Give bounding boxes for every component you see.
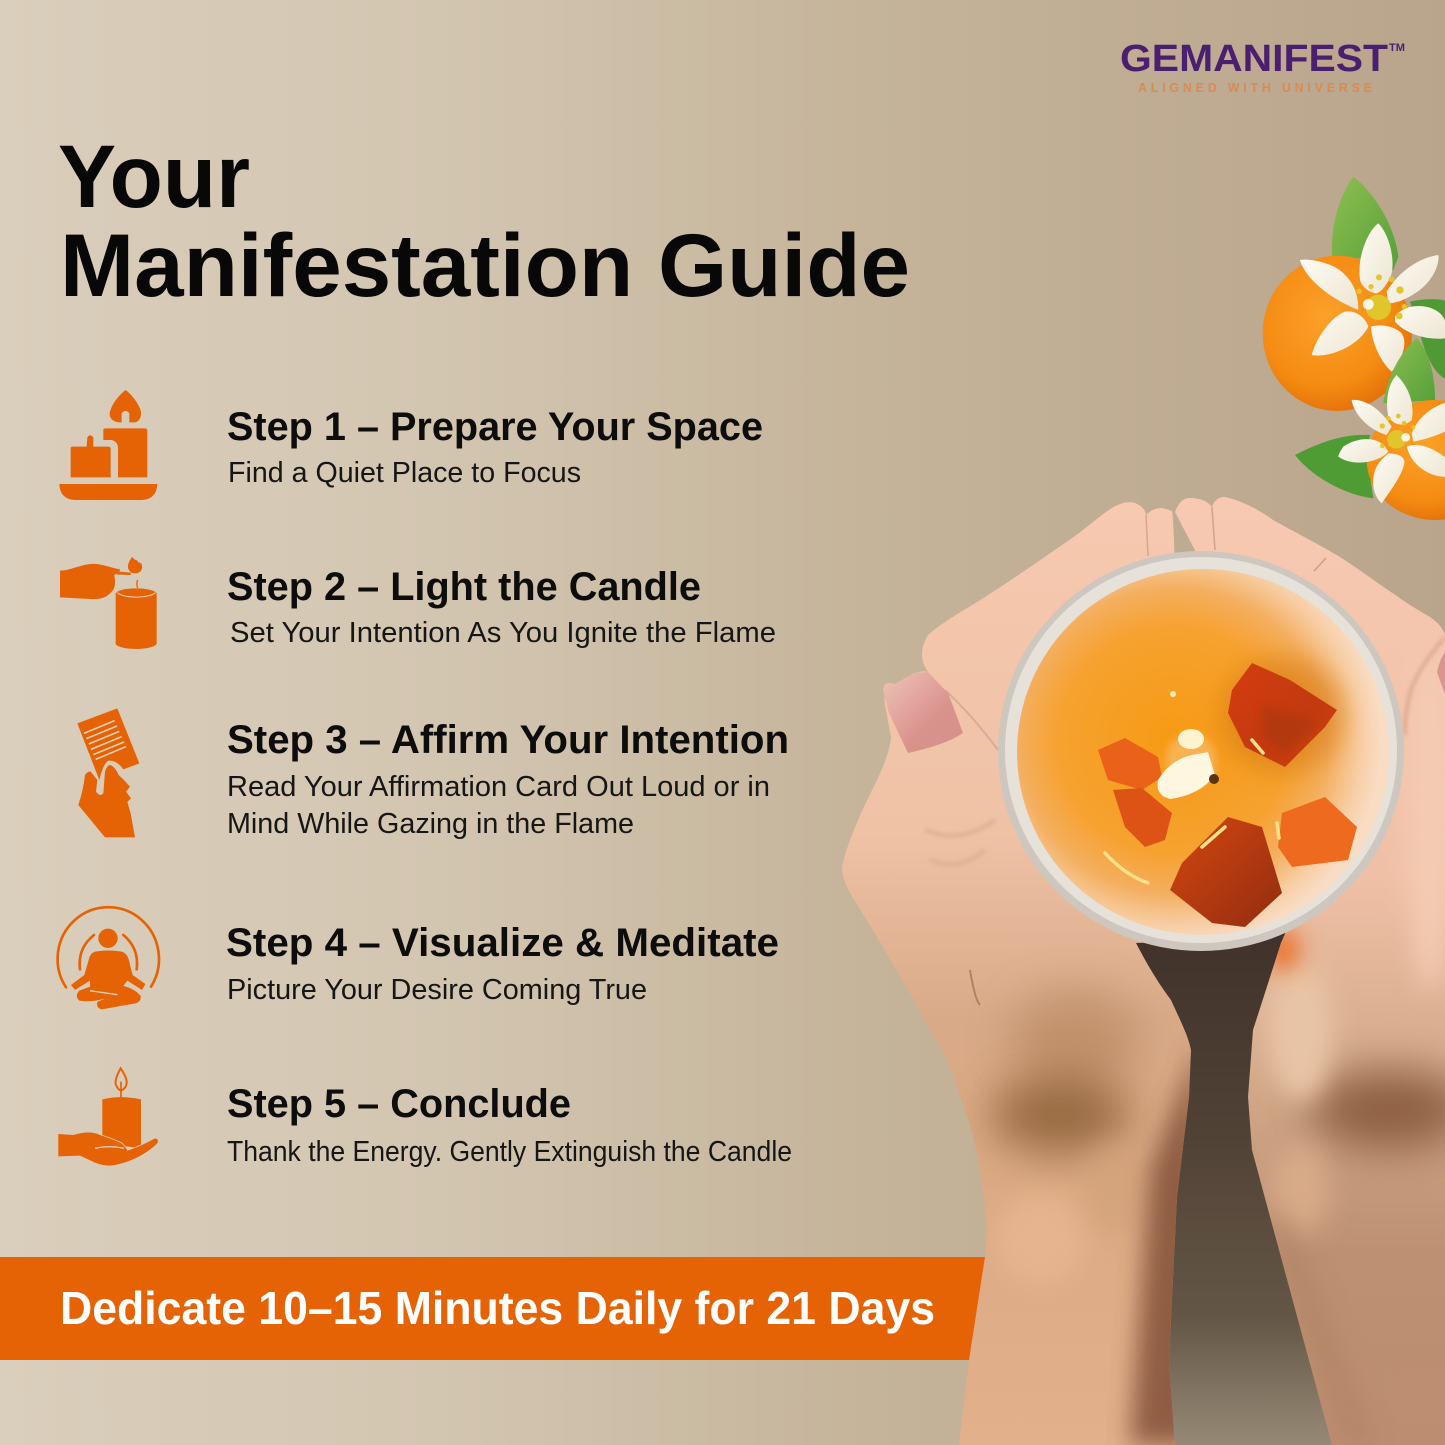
step 5 text: Thank the Energy. Gently Extinguish the Candle (227, 1136, 792, 1168)
flame (1158, 691, 1219, 799)
orange two (1367, 400, 1445, 520)
step 3 text: Mind While Gazing in the Flame (227, 808, 634, 840)
upper leaves (1332, 177, 1445, 380)
title: Your (58, 126, 250, 226)
blossom two stamens (1380, 414, 1415, 449)
step 3 text: Step 3 – Affirm Your Intention (227, 718, 789, 762)
gemstones (1098, 657, 1357, 927)
logo (1120, 38, 1405, 95)
blossom one (1300, 223, 1445, 372)
logo: ALIGNED WITH UNIVERSE (1138, 81, 1372, 95)
icon: hand holding card (77, 708, 139, 837)
icon: candle on open hand (58, 1068, 158, 1166)
step 1 text (227, 405, 763, 489)
step 1 text: Step 1 – Prepare Your Space (227, 405, 763, 449)
step 4 text (226, 921, 779, 1006)
logo: TM (1389, 42, 1405, 54)
right hand (1175, 497, 1445, 1445)
step 2 text: Set Your Intention As You Ignite the Flame (230, 617, 776, 649)
step 5 text: Step 5 – Conclude (227, 1082, 571, 1126)
step 4 text: Step 4 – Visualize & Meditate (226, 921, 779, 965)
candle (998, 551, 1404, 951)
icon: meditating figure (58, 907, 159, 1009)
title (58, 126, 910, 315)
banner: Dedicate 10–15 Minutes Daily for 21 Days (60, 1282, 935, 1334)
logo: GEMANIFEST (1120, 38, 1388, 80)
step 2 text (227, 565, 776, 649)
banner (0, 1257, 992, 1360)
step 5 text (227, 1082, 792, 1168)
icon: hand lighting candle (60, 557, 157, 649)
step 4 text: Picture Your Desire Coming True (227, 974, 647, 1006)
step 2 text: Step 2 – Light the Candle (227, 565, 701, 609)
step 1 text: Find a Quiet Place to Focus (228, 457, 581, 489)
lower leaves (1295, 338, 1435, 498)
blossom two (1338, 375, 1445, 503)
icon: candles on tray (59, 390, 157, 500)
step 3 text: Read Your Affirmation Card Out Loud or in (227, 771, 770, 803)
fingernail (883, 672, 963, 753)
wax highlights (1105, 740, 1279, 883)
title: Manifestation Guide (60, 215, 910, 315)
oranges and blossoms (1263, 177, 1445, 520)
blossom one stamens (1356, 274, 1407, 320)
orange one (1263, 256, 1412, 411)
photo: hands holding candle (842, 497, 1445, 1445)
step 3 text (227, 718, 789, 840)
left hand (842, 502, 1200, 1445)
